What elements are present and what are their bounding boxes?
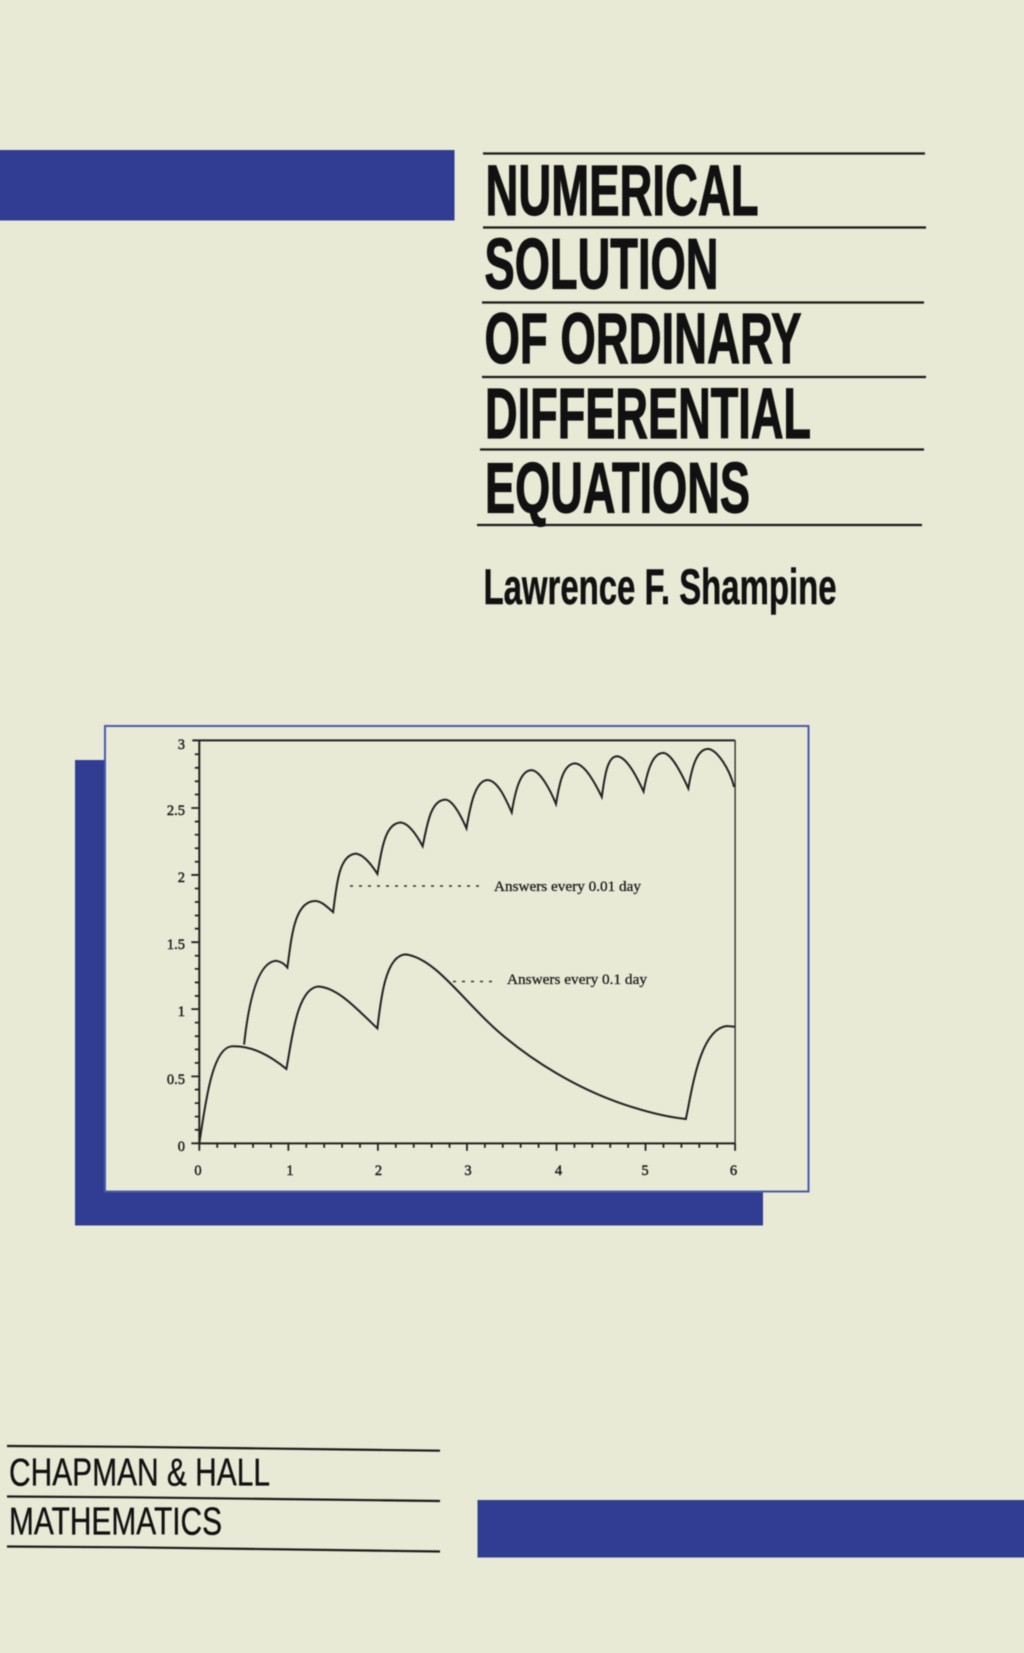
y axis labels: 0.5 xyxy=(167,1072,185,1088)
author name: Lawrence F. Shampine xyxy=(484,559,836,615)
y axis labels: 1 xyxy=(178,1004,185,1020)
bottom-right blue bar xyxy=(478,1500,1024,1558)
x axis labels: 1 xyxy=(286,1163,294,1179)
title block: NUMERICAL xyxy=(486,152,758,231)
y axis labels: 3 xyxy=(178,737,185,753)
series imprint block xyxy=(7,1446,440,1552)
top-left blue bar xyxy=(0,150,454,220)
x axis labels: 2 xyxy=(375,1163,382,1179)
x axis labels: 5 xyxy=(641,1163,649,1179)
x axis labels: 0 xyxy=(194,1163,202,1179)
series imprint block: CHAPMAN & HALL xyxy=(9,1452,270,1494)
title block: SOLUTION xyxy=(484,226,718,304)
y axis labels: 2 xyxy=(178,870,185,886)
series imprint block: MATHEMATICS xyxy=(9,1500,222,1544)
x axis labels: 3 xyxy=(464,1163,472,1179)
y axis labels: 0 xyxy=(178,1139,185,1155)
title block: OF ORDINARY xyxy=(484,300,802,379)
upper curve: answers every 0.01 day xyxy=(244,749,734,1045)
x axis labels: 6 xyxy=(730,1163,737,1179)
x axis labels xyxy=(194,1163,737,1179)
line chart xyxy=(167,737,737,1179)
y axis labels xyxy=(167,737,185,1155)
title block xyxy=(477,152,926,528)
annotation: answers every 0.1 day: Answers every 0.1 day xyxy=(507,972,648,988)
blue offset shadow panel behind chart xyxy=(75,760,763,1226)
y axis labels: 1.5 xyxy=(167,937,185,953)
chart panel xyxy=(105,726,808,1192)
title block: DIFFERENTIAL xyxy=(485,375,811,454)
y axis labels: 2.5 xyxy=(167,803,185,819)
lower curve: answers every 0.1 day xyxy=(199,954,735,1143)
title block: EQUATIONS xyxy=(485,450,750,528)
annotation: answers every 0.01 day: Answers every 0.01 day xyxy=(494,879,641,895)
x axis labels: 4 xyxy=(555,1163,563,1179)
